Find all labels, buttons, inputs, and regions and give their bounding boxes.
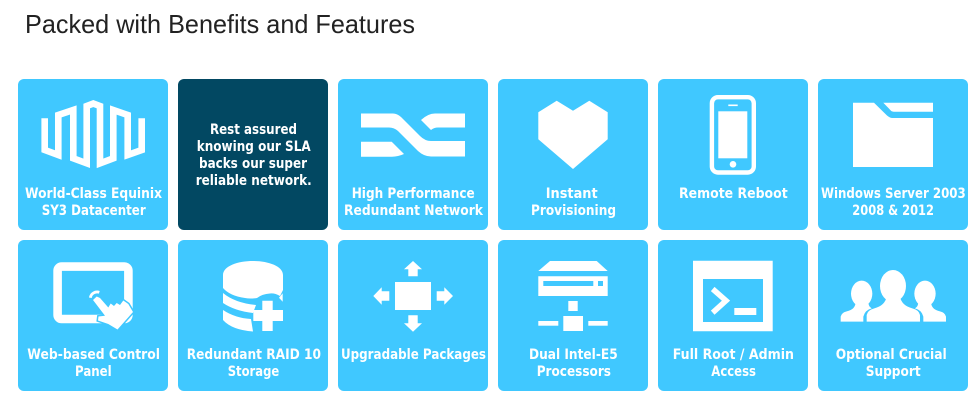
title: Packed with Benefits and Features [25, 9, 415, 39]
label: RAID storage: Storage [228, 364, 279, 380]
icon: crossing arrows [361, 114, 465, 157]
icon: tablet with hand [58, 267, 133, 330]
label: control panel: Panel [75, 364, 112, 380]
label: RAID storage: Redundant RAID 10 [187, 347, 321, 363]
panel: RAID storage [178, 240, 328, 391]
label: upgradable packages: Upgradable Packages [341, 347, 486, 363]
panel: crucial support [818, 240, 968, 391]
label: control panel: Web-based Control [27, 347, 160, 363]
label: crucial support: Optional Crucial [836, 347, 947, 363]
text: SLA message: Rest assured [210, 122, 297, 138]
icon: three people [841, 270, 946, 322]
icon: terminal window [693, 261, 773, 331]
label: crucial support: Support [866, 364, 921, 380]
panel: provisioning [498, 79, 648, 230]
panel: SLA message [178, 79, 328, 230]
icon: folder [853, 103, 933, 167]
label: root access: Access [711, 364, 756, 380]
label: processors: Dual Intel-E5 [529, 347, 618, 363]
panel: control panel [18, 240, 168, 391]
label: provisioning: Provisioning [531, 203, 616, 219]
panel: root access [658, 240, 808, 391]
label: RAID storage [187, 347, 321, 380]
label: root access: Full Root / Admin [673, 347, 794, 363]
icon: Equinix logo [45, 104, 142, 163]
label: datacenter: World-Class Equinix [25, 186, 162, 202]
label: provisioning: Instant [546, 186, 598, 202]
label: network: Redundant Network [344, 203, 484, 219]
label: root access [673, 347, 794, 380]
icon: heart [538, 101, 608, 169]
icon: database with plus [223, 261, 283, 332]
icon: server on network [538, 261, 608, 331]
panel: processors [498, 240, 648, 391]
panel: upgradable packages [338, 240, 488, 391]
icon: expanding box with arrows [373, 261, 453, 332]
label: processors: Processors [537, 364, 611, 380]
text: SLA message: backs our super [199, 156, 307, 172]
label: datacenter [25, 186, 162, 219]
label: network: High Performance [352, 186, 475, 202]
icon: phone [712, 97, 754, 172]
label: datacenter: SY3 Datacenter [42, 203, 146, 219]
panel: network [338, 79, 488, 230]
label: provisioning [531, 186, 616, 219]
panel: remote reboot [658, 79, 808, 230]
text: SLA message [196, 122, 312, 189]
label: windows server [821, 186, 966, 219]
label: processors [529, 347, 618, 380]
label: windows server: 2008 & 2012 [852, 203, 934, 219]
label: network [344, 186, 484, 219]
panel: datacenter [18, 79, 168, 230]
panel: windows server [818, 79, 968, 230]
label: control panel [27, 347, 160, 380]
label: remote reboot: Remote Reboot [679, 186, 788, 202]
label: crucial support [836, 347, 947, 380]
text: SLA message: knowing our SLA [197, 139, 311, 155]
text: SLA message: reliable network. [196, 173, 312, 189]
